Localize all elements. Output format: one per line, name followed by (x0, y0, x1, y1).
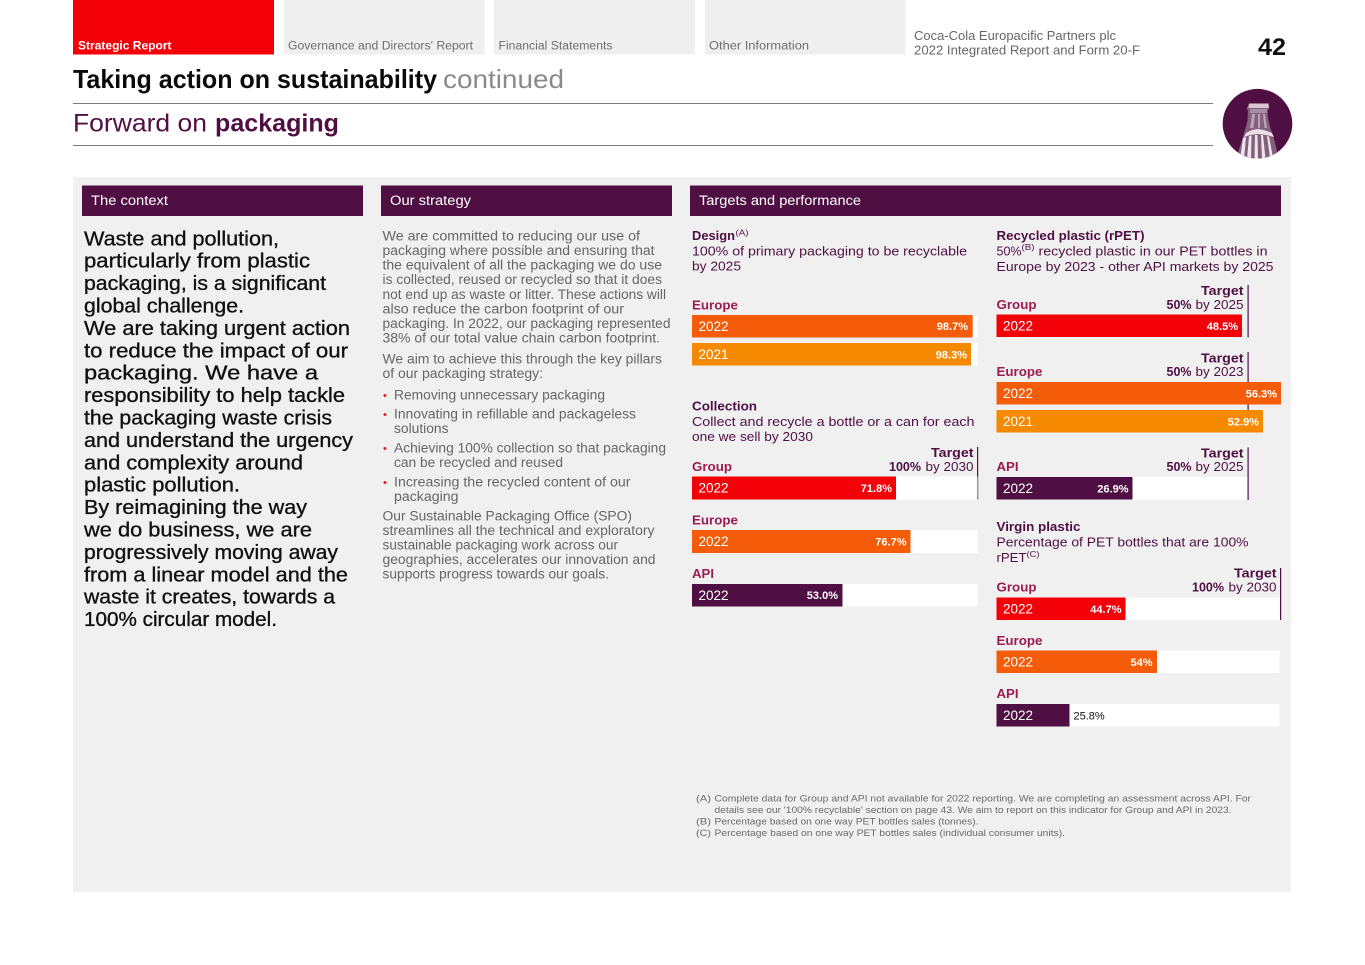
target marker: 100% by 2030: Target (1234, 566, 1277, 580)
tab: Other Information (705, 0, 906, 54)
footnotes: Percentage based on one way PET bottles sales (tonnes). (714, 816, 978, 828)
target marker: 50% by 2025 API (1166, 446, 1249, 500)
target marker: 50% by 2025 Group: Target (1201, 283, 1244, 298)
strategy pillars list (384, 388, 666, 504)
bar: Europe 2021 98.3% (692, 343, 978, 366)
heading: our strategy (381, 186, 672, 216)
navigation tabs (73, 0, 906, 54)
context statement: the packaging waste crisis (84, 406, 332, 430)
bar: Europe 2022 54%: 2022 (1003, 654, 1033, 670)
target marker: 50% by 2025 Group (1166, 283, 1249, 338)
heading: targets and performance: Targets and performance (699, 193, 861, 208)
bar: Europe 2022 98.7%: 98.7% (937, 321, 968, 333)
tab: Governance (284, 0, 484, 54)
chart: virgin plastic: Group (996, 580, 1037, 594)
context statement: packaging. We have a (84, 362, 319, 385)
bar: Europe 2021 52.9% (996, 410, 1263, 432)
panel: our strategy (381, 186, 672, 582)
tab: Financial Statements (494, 0, 695, 54)
report name: 2022 Integrated Report and Form 20-F (914, 44, 1140, 58)
chart: collection: Europe (692, 512, 738, 528)
strategy pillars list: can be recycled and reused (394, 455, 563, 470)
bar: API 2022 25.8%: 2022 (1003, 708, 1033, 723)
target marker: 50% by 2025 API: by 2025 (1196, 459, 1244, 474)
heading: the context (82, 186, 363, 216)
target marker: 100% by 2030: Target (931, 445, 974, 460)
heading: targets and performance (690, 186, 1281, 216)
target marker: 50% by 2023 Europe: Target (1201, 350, 1244, 366)
subtitle: Forward on (73, 110, 207, 138)
context statement: and complexity around (84, 451, 303, 474)
chart: recycled plastic: Europe (996, 364, 1042, 379)
chart: recycled plastic: API (996, 459, 1018, 474)
context statement: Waste and pollution, (84, 227, 279, 250)
context statement: global challenge. (84, 294, 244, 318)
context statement: progressively moving away (84, 541, 339, 564)
footnotes: (C) (696, 828, 711, 839)
bar: Group 2022 44.7% (996, 598, 1280, 620)
bar: API 2022 53.0%: 2022 (698, 588, 729, 603)
footnotes: Percentage based on one way PET bottles sales (individual consumer units). (714, 828, 1065, 839)
bar: Europe 2022 56.3%: 56.3% (1246, 388, 1277, 400)
target marker: 100% by 2030 (889, 445, 978, 500)
chart: collection: Group (692, 459, 732, 474)
panel: the context (82, 186, 363, 631)
context statement: We are taking urgent action (84, 317, 350, 340)
sustainable packaging office text: streamlines all the technical and exploratory (382, 523, 655, 538)
strategy intro text: is collected, reused or recycled so that it does (382, 272, 662, 287)
subtitle: packaging (215, 110, 339, 138)
chart: collection: one we sell by 2030 (692, 429, 813, 444)
sustainable packaging office text: supports progress towards our goals. (382, 566, 609, 582)
context statement: and understand the urgency (84, 429, 354, 452)
panel: targets and performance (690, 186, 1281, 839)
target marker: 50% by 2023 Europe: by 2023 (1196, 364, 1244, 379)
footnotes: (B) (696, 816, 711, 828)
bar: Europe 2022 76.7%: 2022 (698, 534, 729, 549)
page number: 42 (1258, 34, 1286, 61)
footnotes: details see our '100% recyclable' section on page 43. We aim to report on this indicator for Group and API in 2023. (714, 805, 1232, 816)
target marker: 100% by 2030: 100% (1192, 580, 1224, 594)
tab: Strategic Report (73, 0, 274, 54)
context statement: to reduce the impact of our (84, 339, 348, 362)
title: continued (443, 64, 564, 94)
bar: API 2022 25.8%: 25.8% (1074, 710, 1105, 722)
report name: Coca-Cola Europacific Partners plc (914, 29, 1116, 43)
context statement: packaging, is a significant (84, 272, 326, 295)
target marker: 100% by 2030: by 2030 (926, 459, 974, 474)
strategy intro text: also reduce the carbon footprint of our (382, 301, 625, 316)
bar: Europe 2021 98.3%: 2021 (698, 347, 729, 362)
strategy intro text: the equivalent of all the packaging we do use (382, 258, 662, 273)
strategy pillars list: solutions (394, 421, 449, 436)
chart: recycled plastic: recycled plastic in our PET bottles in (1038, 244, 1268, 258)
context statement: responsibility to help tackle (84, 384, 345, 407)
target marker: 100% by 2030 (1192, 566, 1281, 620)
target marker: 50% by 2025 Group: by 2025 (1196, 297, 1244, 312)
chart: recycled plastic: (B) (1022, 242, 1035, 252)
sustainable packaging office text: geographies, accelerates our innovation and (382, 552, 656, 567)
target marker: 50% by 2025 Group: 50% (1166, 297, 1192, 312)
chart: virgin plastic: Percentage of PET bottles that are 100% (996, 534, 1249, 550)
bar: Europe 2022 54% (996, 650, 1280, 673)
bar: Europe 2022 56.3%: 2022 (1003, 386, 1033, 401)
chart: design: (A) (736, 228, 749, 238)
chart: recycled plastic: Recycled plastic (rPET) (996, 228, 1144, 243)
target marker: 100% by 2030: 100% (889, 459, 921, 474)
target marker: 50% by 2025 API: Target (1201, 446, 1244, 460)
bar: Europe 2022 76.7% (692, 530, 978, 553)
bar: Group 2022 48.5%: 48.5% (1207, 321, 1238, 333)
bar: Europe 2022 56.3% (996, 382, 1281, 404)
tab: Other Information: Other Information (709, 40, 809, 52)
strategy intro text (382, 228, 670, 381)
strategy intro text: 38% of our total value chain carbon footprint. (382, 330, 660, 346)
background panel (73, 177, 1291, 892)
chart: design: Europe (692, 298, 738, 312)
chart: recycled plastic: 50% (996, 244, 1022, 258)
context statement: waste it creates, towards a (83, 586, 336, 609)
subtitle (73, 110, 339, 138)
chart: design (692, 228, 978, 366)
title: Taking action on sustainability (73, 64, 438, 94)
strategy pillars list: Removing unnecessary packaging (394, 388, 605, 402)
bar: API 2022 26.9% (996, 477, 1248, 500)
context statement: 100% circular model. (84, 608, 277, 631)
strategy pillars list: Achieving 100% collection so that packaging (394, 440, 666, 456)
bar: API 2022 26.9%: 26.9% (1097, 484, 1129, 496)
target marker: 50% by 2023 Europe: 50% (1166, 364, 1192, 379)
chart: virgin plastic: Europe (996, 633, 1042, 648)
chart: collection: Collect and recycle a bottle or a can for each (692, 414, 974, 429)
strategy intro text: We aim to achieve this through the key pillars (382, 352, 662, 366)
chart: collection: Collection (692, 398, 757, 414)
context statement: By reimagining the way (84, 496, 308, 519)
context statement: we do business, we are (83, 518, 312, 542)
bar: API 2022 53.0%: 53.0% (807, 590, 838, 602)
chart: collection (692, 398, 978, 606)
bar: Europe 2022 98.7%: 2022 (698, 319, 729, 334)
chart: collection: API (692, 566, 714, 581)
chart: virgin plastic: Virgin plastic (996, 519, 1080, 534)
sustainable packaging office text: sustainable packaging work across our (382, 538, 619, 552)
sustainable packaging office text (382, 508, 656, 582)
icon: bottle in circle (1223, 89, 1292, 160)
context statement: plastic pollution. (84, 474, 240, 497)
tab: Strategic Report: Strategic Report (78, 40, 172, 52)
bar: Group 2022 44.7%: 44.7% (1090, 604, 1122, 616)
bar: Group 2022 71.8% (692, 476, 978, 500)
bar: Europe 2021 52.9%: 52.9% (1228, 416, 1259, 428)
footnotes (696, 794, 1251, 839)
chart: virgin plastic (996, 519, 1281, 726)
bar: API 2022 26.9%: 2022 (1003, 481, 1033, 496)
context statement (83, 227, 354, 631)
bar: Group 2022 48.5%: 2022 (1003, 318, 1033, 334)
strategy pillars list: Innovating in refillable and packageless (394, 406, 636, 422)
footnotes: (A) (696, 794, 711, 804)
tab: Governance: Governance and Directors' Report (288, 40, 474, 52)
chart: recycled plastic (996, 228, 1281, 500)
strategy intro text: packaging. In 2022, our packaging represented (382, 316, 670, 331)
bar: API 2022 53.0% (692, 584, 978, 606)
bar: Group 2022 71.8%: 2022 (698, 480, 729, 496)
strategy intro text: packaging where possible and ensuring that (382, 243, 655, 258)
bar: Europe 2021 98.3%: 98.3% (936, 350, 967, 362)
bar: Europe 2022 54%: 54% (1130, 657, 1153, 669)
strategy intro text: We are committed to reducing our use of (382, 228, 640, 244)
bar: Group 2022 44.7%: 2022 (1003, 602, 1033, 616)
strategy pillars list: packaging (394, 489, 458, 504)
strategy intro text: of our packaging strategy: (382, 366, 543, 381)
report name (914, 29, 1140, 58)
chart: design: Design (692, 228, 735, 243)
context statement: from a linear model and the (84, 563, 348, 586)
chart: design: by 2025 (692, 258, 741, 274)
bar: Europe 2022 98.7% (692, 315, 978, 338)
chart: virgin plastic: rPET (996, 550, 1027, 565)
tab: Financial Statements: Financial Statements (498, 40, 613, 52)
target marker: 50% by 2025 API: 50% (1166, 459, 1192, 474)
context statement: particularly from plastic (84, 250, 310, 273)
target marker: 50% by 2023 Europe (1166, 350, 1249, 410)
heading: our strategy: Our strategy (390, 193, 471, 208)
chart: virgin plastic: API (996, 686, 1018, 701)
chart: design: 100% of primary packaging to be recyclable (692, 244, 967, 258)
bar: Group 2022 48.5% (996, 314, 1242, 337)
strategy intro text: not end up as waste or litter. These actions will (382, 287, 666, 302)
sustainable packaging office text: Our Sustainable Packaging Office (SPO) (382, 508, 632, 524)
bar: API 2022 25.8% (996, 704, 1280, 726)
bar: Group 2022 71.8%: 71.8% (861, 483, 892, 495)
chart: virgin plastic: (C) (1026, 549, 1040, 559)
chart: recycled plastic: Group (996, 297, 1037, 312)
bar: Europe 2022 76.7%: 76.7% (875, 536, 907, 548)
footnotes: Complete data for Group and API not available for 2022 reporting. We are completing an assessment across API. For (714, 794, 1251, 804)
chart: recycled plastic: Europe by 2023 - other API markets by 2025 (996, 259, 1274, 274)
strategy pillars list: Increasing the recycled content of our (394, 474, 631, 490)
target marker: 100% by 2030: by 2030 (1228, 580, 1276, 594)
heading: the context: The context (91, 193, 168, 208)
bar: Europe 2021 52.9%: 2021 (1003, 414, 1033, 429)
